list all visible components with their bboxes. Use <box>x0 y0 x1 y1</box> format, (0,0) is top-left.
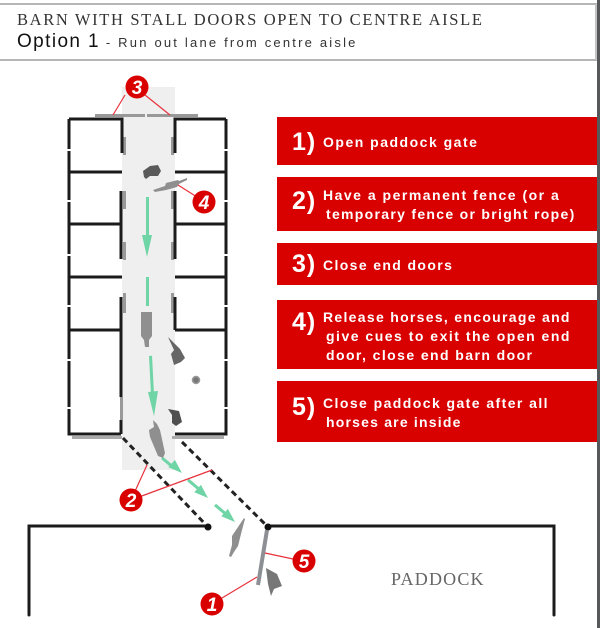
run-out lane dashed fences <box>123 438 272 530</box>
callout markers: 5 <box>299 552 310 573</box>
callout markers: 2 <box>125 491 137 512</box>
step 2: Have a permanent fence (or a <box>323 187 560 203</box>
step 2: 2) <box>292 187 316 215</box>
person aisle 1 <box>168 337 185 365</box>
step 5: horses are inside <box>326 414 462 430</box>
centre aisle <box>122 87 175 470</box>
step 4: Release horses, encourage and <box>323 309 571 325</box>
person top <box>143 165 161 179</box>
step 2 <box>277 177 597 231</box>
horses and people <box>141 165 282 596</box>
title: BARN WITH STALL DOORS OPEN TO CENTRE AISLE <box>17 10 484 29</box>
step 1: 1) <box>292 128 316 156</box>
paddock gate <box>258 530 267 585</box>
horse aisle <box>141 312 152 347</box>
person aisle 2 <box>168 409 182 426</box>
step 2: temporary fence or bright rope) <box>326 206 576 222</box>
barn walls <box>69 119 226 434</box>
horse lane <box>149 420 165 458</box>
callout markers <box>120 76 316 616</box>
step 5 <box>277 381 597 442</box>
step 5: Close paddock gate after all <box>323 395 549 411</box>
header band <box>0 3 597 61</box>
person gate <box>266 568 282 596</box>
step 4: give cues to exit the open end <box>326 328 571 344</box>
subtitle: Option 1 - Run out lane from centre aisle <box>17 31 358 52</box>
step 3 <box>277 243 597 285</box>
step 4: 4) <box>292 308 316 336</box>
callout markers: 4 <box>198 193 210 214</box>
barn doors, closed <box>72 114 224 439</box>
callout markers: 1 <box>207 595 217 616</box>
leader lines <box>113 95 293 604</box>
step 5: 5) <box>292 393 316 421</box>
step 3: Close end doors <box>323 257 453 273</box>
step 1 <box>277 117 597 165</box>
right edge strip <box>597 0 600 628</box>
step 4 <box>277 300 597 369</box>
paddock fence <box>29 526 554 615</box>
horse movement arrows <box>142 197 235 522</box>
outer wall gaps <box>66 149 229 409</box>
post <box>192 376 200 384</box>
paddock label: PADDOCK <box>391 569 485 589</box>
step 4: door, close end barn door <box>326 347 533 363</box>
step 3: 3) <box>292 250 316 278</box>
horse paddock <box>229 518 245 557</box>
step 1: Open paddock gate <box>323 134 478 150</box>
callout markers: 3 <box>132 78 143 99</box>
horse 4 <box>153 178 187 192</box>
